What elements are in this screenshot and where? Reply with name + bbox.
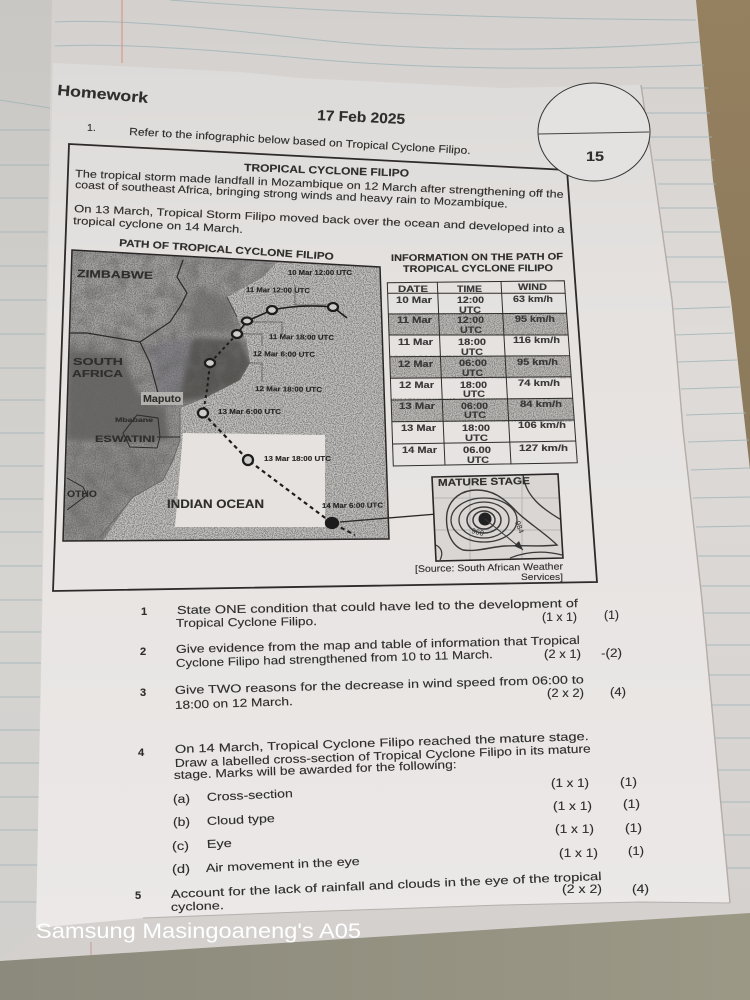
question 3: (4) bbox=[610, 687, 626, 699]
row: 13 Mar 18:00: 13 Mar bbox=[401, 423, 437, 433]
mark circle bbox=[538, 83, 650, 181]
intro text bbox=[73, 168, 565, 236]
camera watermark: Samsung Masingoaneng's A05 bbox=[36, 919, 361, 943]
row: 12 Mar 18:00: UTC bbox=[463, 389, 486, 399]
date: 17 Feb 2025 bbox=[317, 108, 405, 128]
question 3 bbox=[140, 674, 626, 712]
row: 10 Mar: 10 Mar bbox=[396, 295, 433, 305]
row: 12 Mar 06:00: UTC bbox=[462, 368, 484, 378]
question 5: Account for the lack of rainfall and clouds in the eye of the tropical bbox=[171, 871, 602, 901]
row: 11 Mar 18:00: 18:00 bbox=[458, 337, 486, 347]
part b bbox=[173, 799, 640, 829]
header row: TIME bbox=[457, 284, 482, 294]
map time labels: 13 Mar 18:00 UTC bbox=[264, 456, 331, 463]
infographic frame bbox=[53, 144, 597, 591]
part d: (d) bbox=[172, 864, 190, 876]
map time labels: 11 Mar 18:00 UTC bbox=[269, 334, 334, 342]
question 2: Give evidence from the map and table of information that Tropical bbox=[176, 635, 580, 656]
row: 14 Mar bbox=[402, 443, 568, 465]
map place labels: INDIAN OCEAN bbox=[167, 499, 264, 511]
header row bbox=[398, 282, 547, 294]
part b: Cloud type bbox=[207, 813, 275, 828]
row: 11 Mar 12:00: 11 Mar bbox=[397, 315, 433, 325]
question number 1: 1. bbox=[87, 122, 96, 134]
part d: (1 x 1) bbox=[559, 848, 598, 860]
question 2 bbox=[140, 635, 622, 670]
wind table bbox=[387, 281, 577, 466]
map label backing bbox=[141, 392, 183, 405]
instruction: Refer to the infographic below based on Tropical Cyclone Filipo. bbox=[129, 126, 471, 157]
map place labels: Maputo bbox=[143, 394, 181, 405]
arrow: map to mature stage bbox=[340, 510, 448, 522]
map bbox=[60, 245, 395, 545]
question 5: 5 bbox=[135, 890, 141, 902]
row: 13 Mar 18:00: UTC bbox=[465, 433, 489, 443]
table heading bbox=[391, 251, 563, 275]
source note: [Source: South African Weather bbox=[415, 561, 563, 575]
row: 13 Mar 06:00: 13 Mar bbox=[399, 401, 436, 411]
row: 10 Mar: 63 km/h bbox=[513, 294, 553, 304]
question 2: Cyclone Filipo had strengthened from 10 to 11 March. bbox=[176, 649, 493, 670]
question 1 bbox=[141, 598, 619, 630]
part a: (1) bbox=[620, 777, 637, 789]
map time labels: 11 Mar 12:00 UTC bbox=[246, 287, 310, 295]
question 4: On 14 March, Tropical Cyclone Filipo reached the mature stage. bbox=[175, 731, 589, 756]
row: 12 Mar 18:00: 12 Mar bbox=[399, 380, 435, 390]
intro text: tropical cyclone on 14 March. bbox=[73, 215, 243, 236]
question 5: (2 x 2) bbox=[562, 884, 602, 896]
part c: (c) bbox=[172, 841, 189, 853]
mature stage inset bbox=[430, 470, 565, 565]
mature stage inset: MATURE STAGE bbox=[438, 476, 530, 489]
heading: Homework: Homework bbox=[57, 82, 150, 107]
row: 14 Mar: UTC bbox=[467, 455, 490, 465]
row: 12 Mar 06:00: 12 Mar bbox=[398, 359, 434, 369]
cleared area behind ocean label bbox=[175, 433, 325, 527]
header row: DATE bbox=[398, 284, 428, 294]
map time labels: 10 Mar 12:00 UTC bbox=[288, 270, 352, 277]
cyclone track bbox=[203, 306, 355, 535]
mature stage inset: 984 bbox=[513, 520, 526, 534]
question 5 bbox=[135, 871, 649, 914]
part b: (1 x 1) bbox=[553, 801, 592, 813]
header row: WIND bbox=[518, 282, 547, 292]
row: 14 Mar: 06.00 bbox=[463, 445, 491, 455]
question 1: (1 x 1) bbox=[542, 612, 577, 624]
question 1: Tropical Cyclone Filipo. bbox=[176, 616, 317, 630]
row: 12 Mar 18:00: 74 km/h bbox=[518, 378, 560, 388]
row: 13 Mar 18:00: 106 km/h bbox=[518, 420, 566, 430]
row: 13 Mar 06:00: 84 km/h bbox=[520, 399, 562, 409]
intro text: On 13 March, Tropical Storm Filipo moved back over the ocean and developed into a bbox=[74, 203, 565, 236]
map heading: PATH OF TROPICAL CYCLONE FILIPO bbox=[119, 238, 334, 263]
row: 13 Mar 06:00: 06:00 bbox=[461, 401, 488, 411]
row: 12 Mar 18:00 bbox=[399, 378, 560, 399]
row: 10 Mar: UTC bbox=[459, 305, 482, 315]
question 5: (4) bbox=[632, 884, 649, 896]
table grid bbox=[387, 281, 577, 466]
map place labels: OTHO bbox=[67, 489, 97, 499]
table heading: TROPICAL CYCLONE FILIPO bbox=[403, 263, 553, 275]
row: 11 Mar 18:00: 116 km/h bbox=[513, 335, 560, 345]
question 5: cyclone. bbox=[171, 900, 224, 914]
question 1: State ONE condition that could have led to the development of bbox=[177, 598, 579, 617]
row: 14 Mar: 127 km/h bbox=[519, 443, 568, 453]
part c: (1 x 1) bbox=[555, 824, 594, 836]
map place labels: SOUTH bbox=[73, 356, 123, 368]
question 3: 3 bbox=[140, 687, 146, 699]
question 4: 4 bbox=[138, 747, 145, 759]
map place labels: Mbabane bbox=[115, 417, 154, 424]
part b: (b) bbox=[173, 817, 190, 829]
row: 10 Mar: 12:00 bbox=[457, 295, 484, 305]
mark total: 15 bbox=[586, 148, 604, 164]
question 2: 2 bbox=[140, 646, 146, 658]
row: 13 Mar 06:00 bbox=[399, 399, 562, 420]
question 4: stage. Marks will be awarded for the following: bbox=[174, 759, 457, 782]
map place labels: ESWATINI bbox=[95, 434, 155, 444]
question 1: 1 bbox=[141, 606, 147, 618]
part a: (a) bbox=[173, 794, 190, 806]
row: 11 Mar 18:00: UTC bbox=[461, 347, 484, 357]
map time labels: 13 Mar 6:00 UTC bbox=[218, 409, 281, 416]
part c: (1) bbox=[625, 823, 642, 835]
map place labels: AFRICA bbox=[72, 368, 124, 380]
part a: Cross-section bbox=[207, 788, 293, 804]
question 3: 18:00 on 12 March. bbox=[175, 696, 293, 712]
row: 11 Mar 12:00: 12:00 bbox=[457, 315, 484, 325]
map time labels: 14 Mar 6:00 UTC bbox=[322, 502, 383, 510]
map border bbox=[63, 250, 389, 541]
map time labels bbox=[218, 270, 383, 510]
row: 10 Mar bbox=[396, 294, 553, 315]
row: 12 Mar 06:00: 06:00 bbox=[459, 358, 487, 368]
part a: (1 x 1) bbox=[551, 778, 589, 790]
part d bbox=[172, 846, 644, 876]
map time labels: 12 Mar 6:00 UTC bbox=[253, 351, 315, 359]
part d: Air movement in the eye bbox=[206, 856, 360, 875]
part c: Eye bbox=[207, 838, 232, 851]
cyclone symbols bbox=[198, 303, 338, 528]
question 3: Give TWO reasons for the decrease in wind speed from 06:00 to bbox=[175, 674, 584, 697]
row: 11 Mar 18:00: 11 Mar bbox=[398, 337, 434, 347]
row: 12 Mar 06:00 bbox=[398, 357, 558, 378]
intro text: coast of southeast Africa, bringing strong winds and heavy rain to Mozambique. bbox=[75, 179, 508, 211]
table heading: INFORMATION ON THE PATH OF bbox=[391, 251, 563, 264]
row: 11 Mar 18:00 bbox=[398, 335, 560, 357]
question 2: -(2) bbox=[601, 648, 622, 660]
row: 11 Mar 12:00: 95 km/h bbox=[515, 314, 555, 324]
row: 13 Mar 06:00: UTC bbox=[464, 410, 487, 420]
source note bbox=[415, 561, 563, 583]
part d: (1) bbox=[628, 846, 644, 858]
row: 11 Mar 12:00 bbox=[397, 314, 555, 335]
row: 11 Mar 12:00: UTC bbox=[460, 325, 483, 335]
part a bbox=[173, 777, 637, 806]
map time labels: 12 Mar 18:00 UTC bbox=[255, 386, 322, 394]
map place labels bbox=[67, 268, 264, 511]
shaded rows bbox=[388, 313, 574, 422]
question 3: (2 x 2) bbox=[547, 688, 584, 700]
map place labels: ZIMBABWE bbox=[77, 268, 153, 282]
question 4: Draw a labelled cross-section of Tropical Cyclone Filipo in its mature bbox=[175, 743, 591, 770]
row: 12 Mar 18:00: 18:00 bbox=[460, 380, 487, 390]
question 4 bbox=[138, 731, 644, 876]
part b: (1) bbox=[623, 799, 640, 811]
row: 13 Mar 18:00: 18:00 bbox=[462, 423, 490, 433]
row: 13 Mar 18:00 bbox=[401, 420, 566, 443]
question 1: (1) bbox=[604, 610, 619, 622]
infographic title: TROPICAL CYCLONE FILIPO bbox=[244, 162, 409, 180]
question 2: (2 x 1) bbox=[544, 649, 581, 661]
source note: Services] bbox=[521, 572, 563, 583]
row: 12 Mar 06:00: 95 km/h bbox=[517, 357, 558, 367]
row: 14 Mar: 14 Mar bbox=[402, 445, 438, 455]
intro text: The tropical storm made landfall in Mozambique on 12 March after strengthening off the bbox=[75, 168, 564, 201]
part c bbox=[172, 823, 642, 853]
mature stage inset: 960 bbox=[471, 526, 485, 538]
